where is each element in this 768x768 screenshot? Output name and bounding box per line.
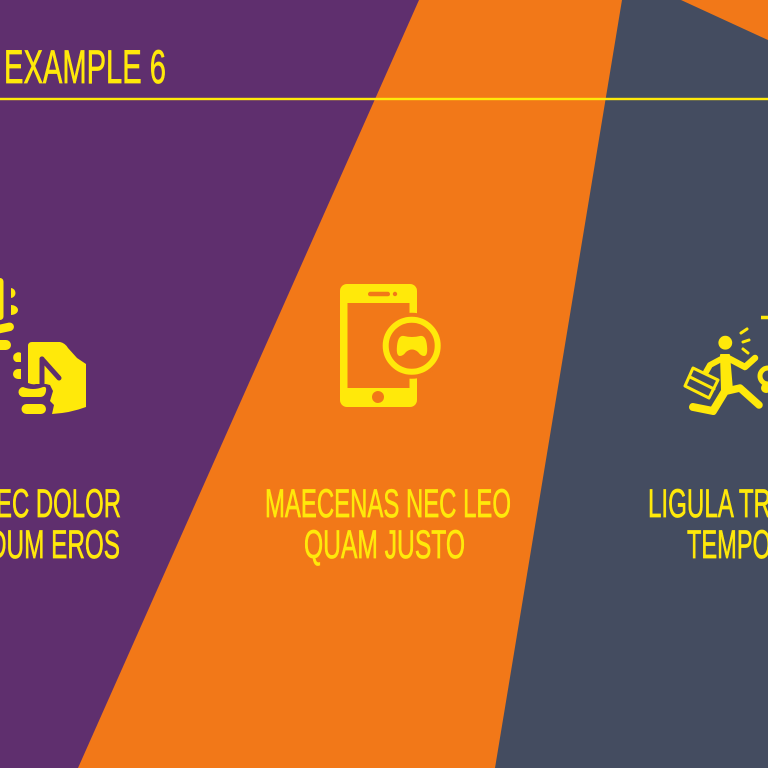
label: left column [0,482,121,567]
icon: running businessman [685,318,768,411]
panel: slate wedge [495,0,768,768]
label: left column: EC DOLOR [0,482,121,526]
title: EXAMPLE 6 [4,40,166,93]
label: middle column: MAECENAS NEC LEO [265,482,511,526]
label: middle column [265,482,511,567]
icon: smartphone with game controller [340,284,445,407]
label: right column [648,482,768,567]
label: middle column: QUAM JUSTO [304,523,465,567]
panel: purple wedge [0,0,419,768]
icon: hand holding phone [0,278,86,414]
